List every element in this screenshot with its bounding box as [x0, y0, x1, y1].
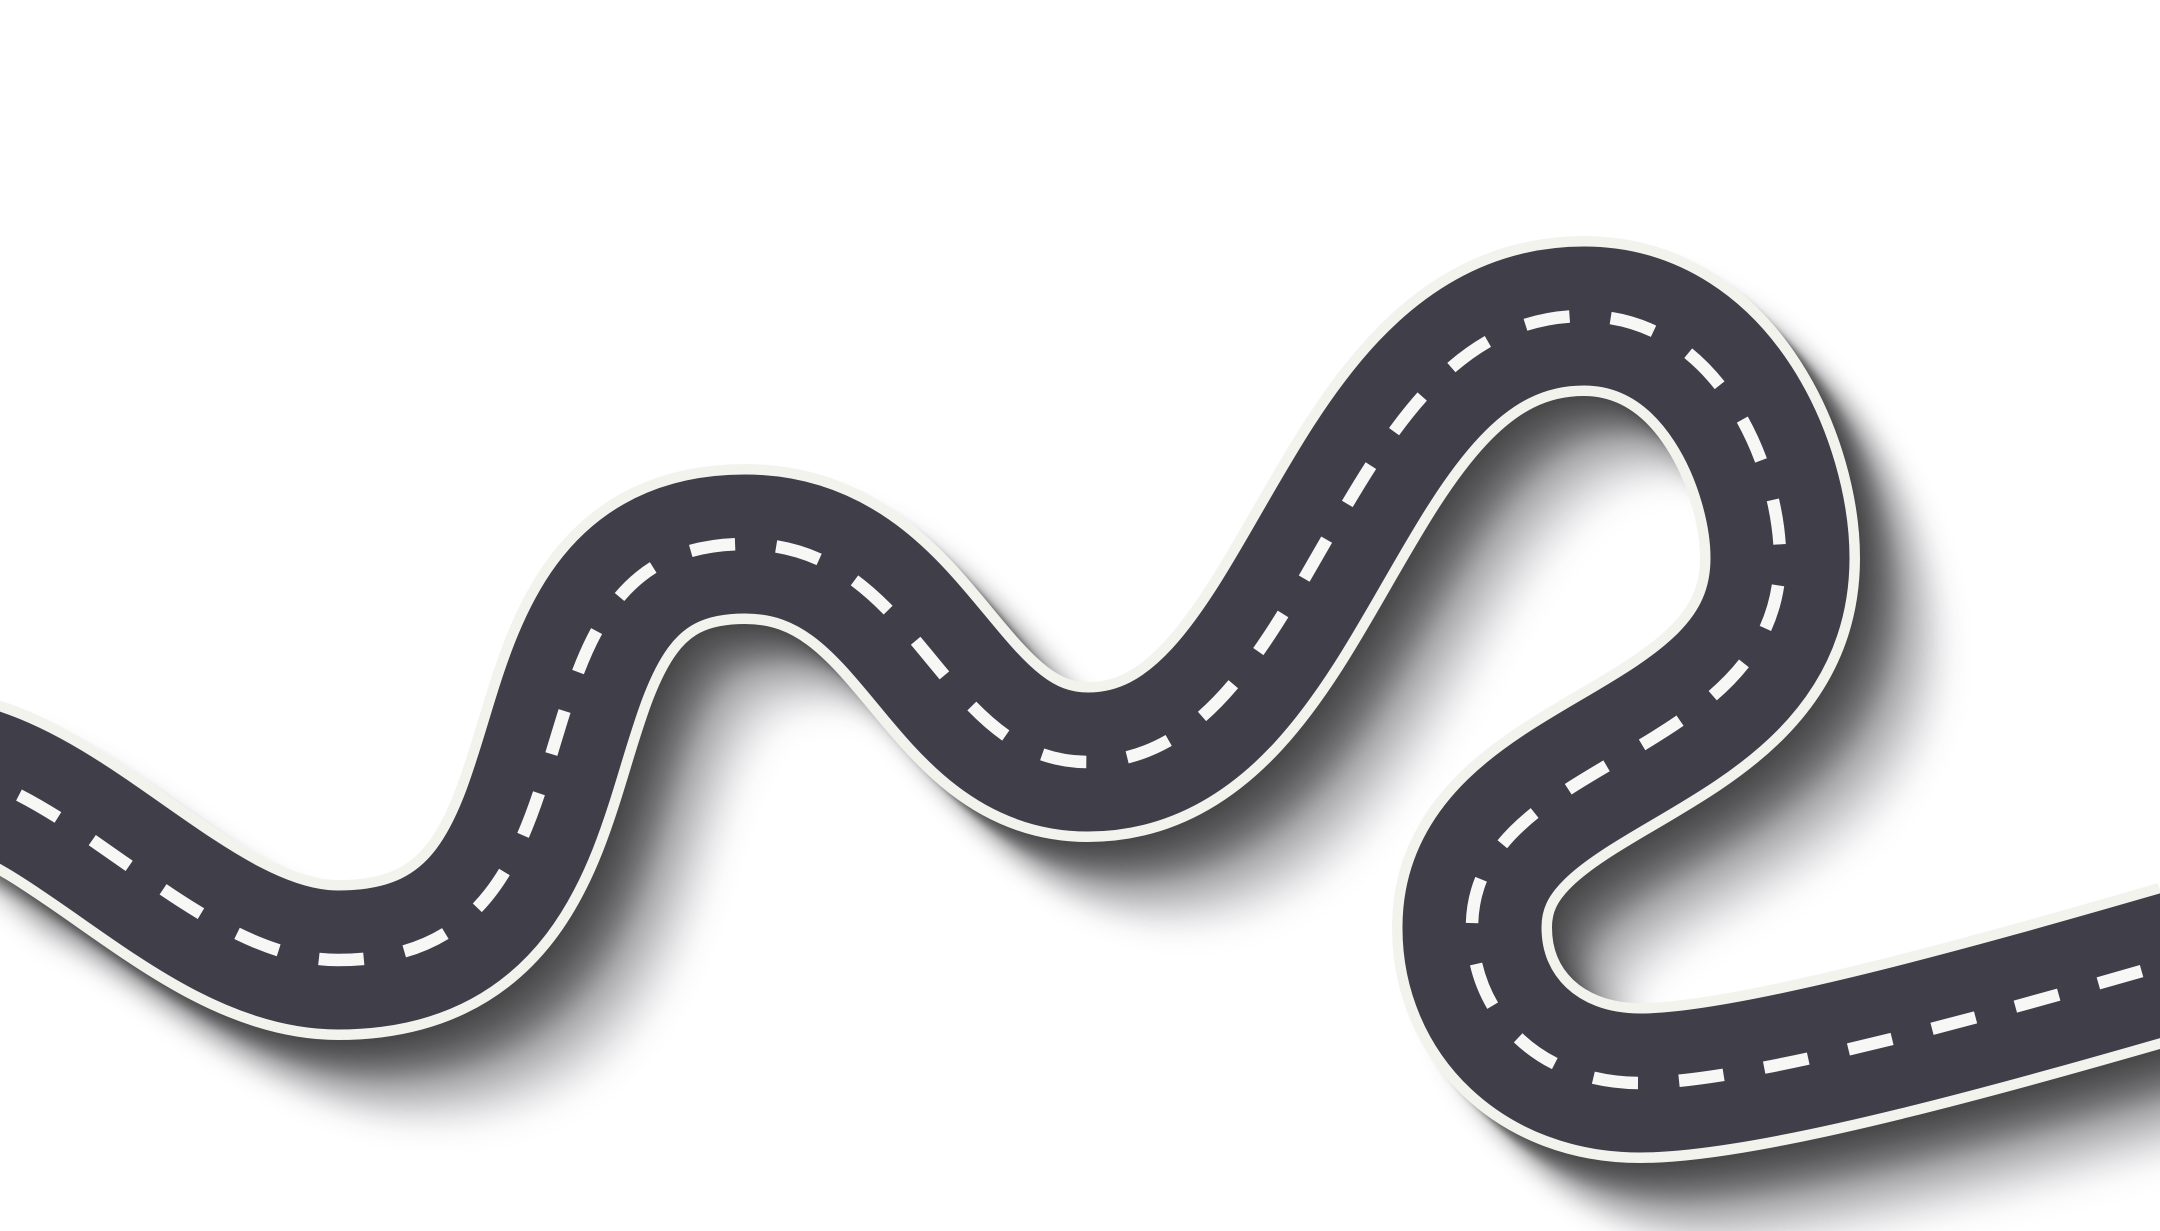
road cast shadow [0, 321, 2160, 1183]
road edge line [0, 316, 2160, 1083]
asphalt road surface [0, 316, 2160, 1083]
dashed centre lane markings [0, 316, 2160, 1083]
